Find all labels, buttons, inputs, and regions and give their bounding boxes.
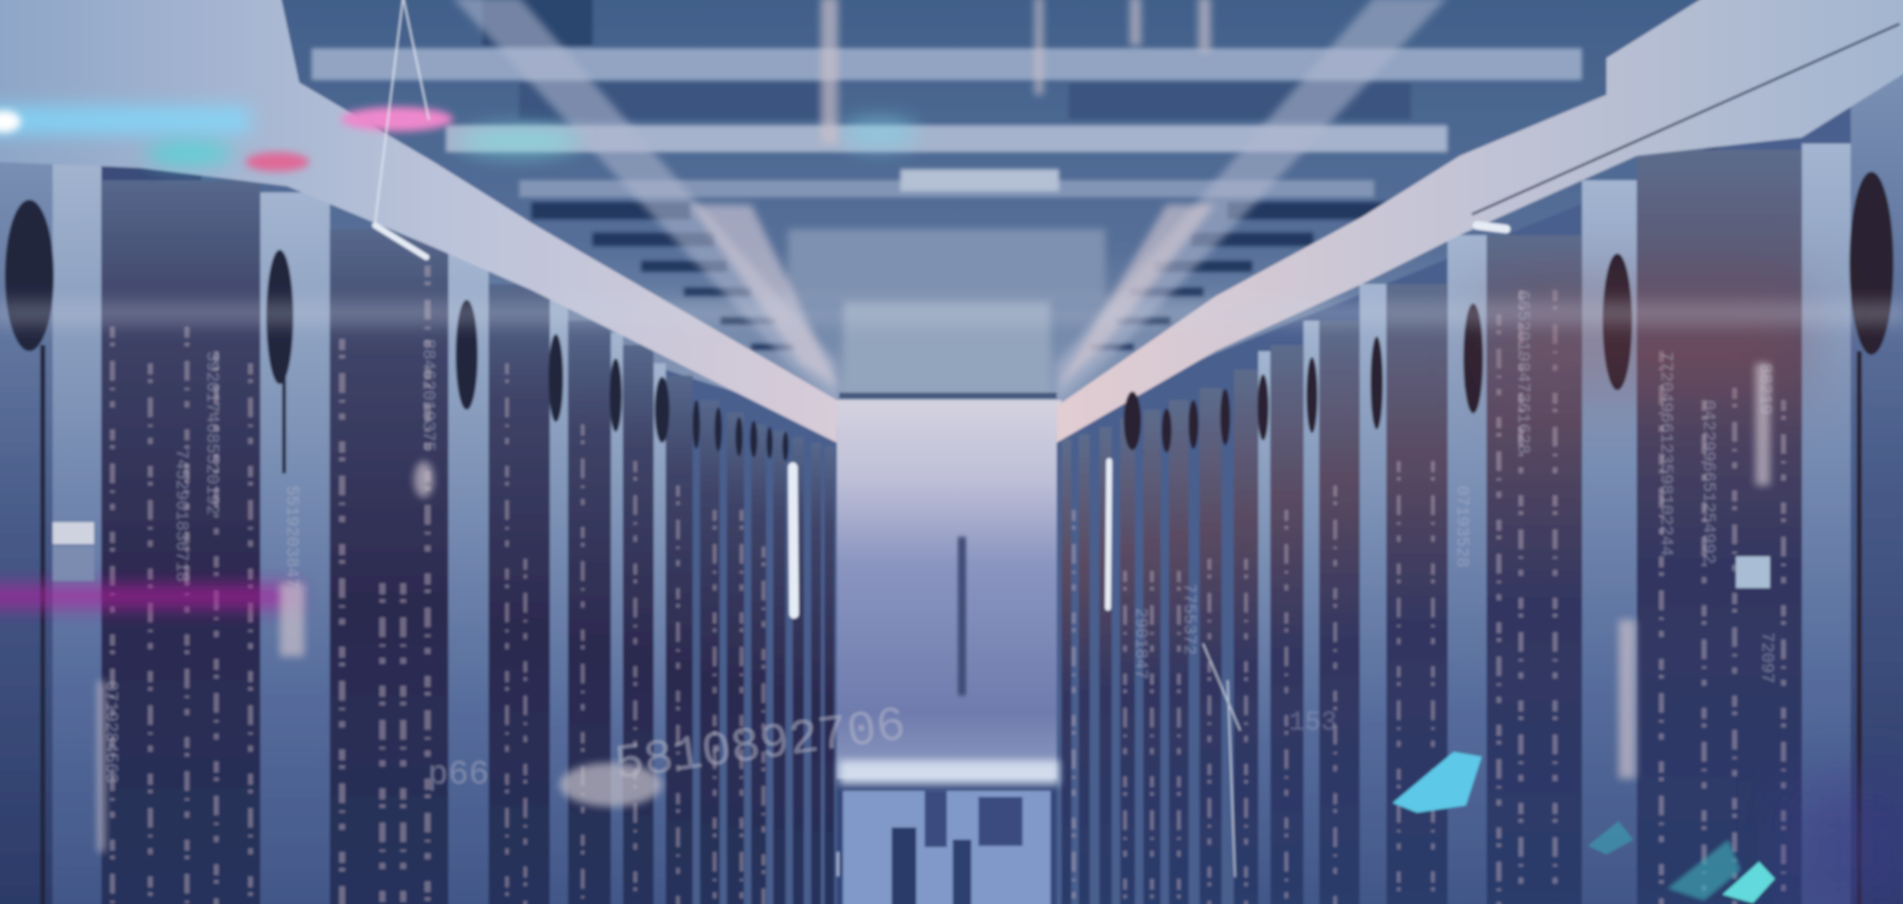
- left wall: [0, 0, 837, 904]
- lens flare: cyan on ceiling: [458, 118, 919, 156]
- lens flare: cyan and white, top left: [0, 107, 250, 166]
- soffit edge line, right: [1472, 24, 1900, 214]
- floor: [776, 779, 1093, 904]
- right rack doors: [1062, 150, 1802, 904]
- right wall: [1057, 0, 1903, 904]
- cyan shards, bottom right: [1393, 752, 1775, 903]
- streaming digits: 88462019375: [418, 339, 437, 452]
- horizontal light band: [0, 305, 1903, 322]
- left ceiling soffit: [0, 0, 837, 443]
- ceiling: [202, 0, 1704, 412]
- deep blue-violet corner: [1790, 779, 1903, 904]
- left handles: [5, 200, 789, 904]
- far post: [958, 537, 966, 696]
- streaming digits: 6652019847361628: [1512, 290, 1531, 454]
- red haze on right racks: [1490, 284, 1808, 394]
- floating number text: p66: [428, 756, 489, 794]
- right handles: [1124, 172, 1893, 904]
- centre corridor glow: [832, 400, 1062, 791]
- streaming digits: 0719284563: [100, 681, 119, 783]
- rack door streaks: [112, 266, 1783, 904]
- lens flare: magenta band: [0, 586, 299, 608]
- hanging wires and light fragments: [375, 0, 1506, 876]
- streaming digits: 72097: [1757, 632, 1776, 683]
- ceiling centre haze: [452, 0, 1448, 400]
- streaming digits: 2901847: [1130, 608, 1149, 679]
- streaming digits: 88219: [1754, 363, 1773, 415]
- streaming digits: 7452901836718: [171, 449, 190, 582]
- right ceiling soffit: [1057, 0, 1903, 443]
- right pillars: [1258, 144, 1851, 904]
- floating number text: 5810892706: [611, 697, 909, 793]
- left rack doors: [101, 180, 834, 904]
- streaming digits: 5519203847: [281, 485, 300, 588]
- left pillars: [53, 156, 666, 904]
- rack indicator lights: [53, 522, 1770, 588]
- floating number text: 153: [1289, 709, 1337, 739]
- streaming digits: 0422996651254992: [1698, 400, 1717, 564]
- streaming digits: 07193528: [1451, 485, 1470, 567]
- floating number text: [428, 697, 1337, 807]
- lens flare: pink: [246, 107, 453, 172]
- streaming digits: 77204966123598102244: [1655, 351, 1674, 556]
- streaming digits: [100, 290, 1776, 783]
- streaming digits: 3920174685520192: [202, 351, 221, 515]
- streaming digits: 7755372: [1179, 583, 1198, 655]
